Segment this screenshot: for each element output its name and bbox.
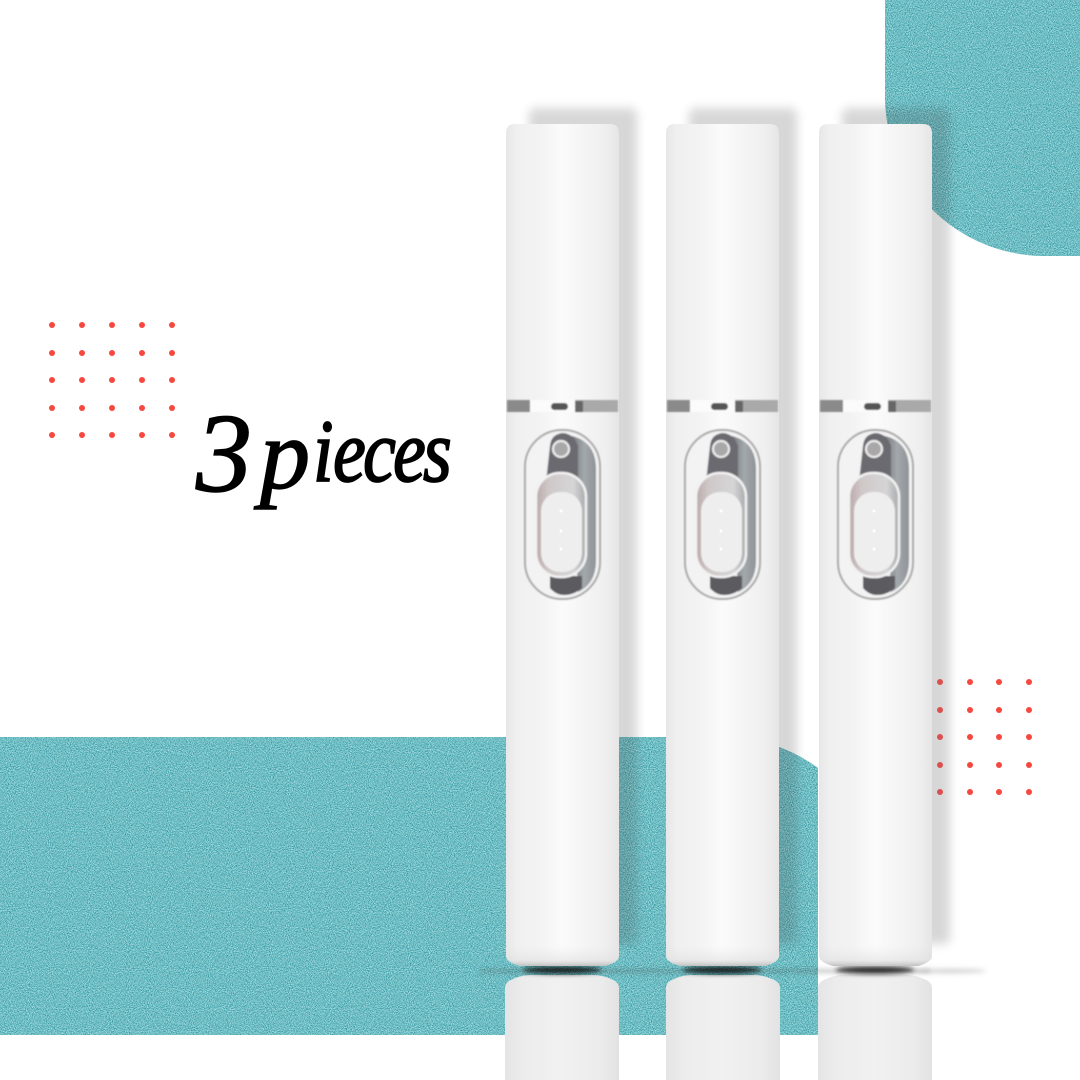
pen 2 <box>666 124 779 966</box>
teal panel: top right <box>885 0 1080 256</box>
heading: 3 pieces: ieces <box>313 402 452 501</box>
pen shadows <box>529 108 950 944</box>
pen 3 <box>819 124 932 966</box>
contact shadows under pens <box>480 966 986 974</box>
pen 1 <box>506 124 619 966</box>
red dot grid: left <box>49 322 175 438</box>
heading: 3 pieces <box>195 392 452 516</box>
heading: 3 pieces: 3 <box>195 392 252 516</box>
pen reflection 1 <box>505 975 619 1080</box>
red dot grid: right <box>937 679 1032 795</box>
heading: 3 pieces: p <box>254 399 310 510</box>
pen reflection 3 <box>818 975 932 1080</box>
pen reflection 2 <box>666 975 780 1080</box>
teal panel: bottom band <box>0 737 818 1035</box>
